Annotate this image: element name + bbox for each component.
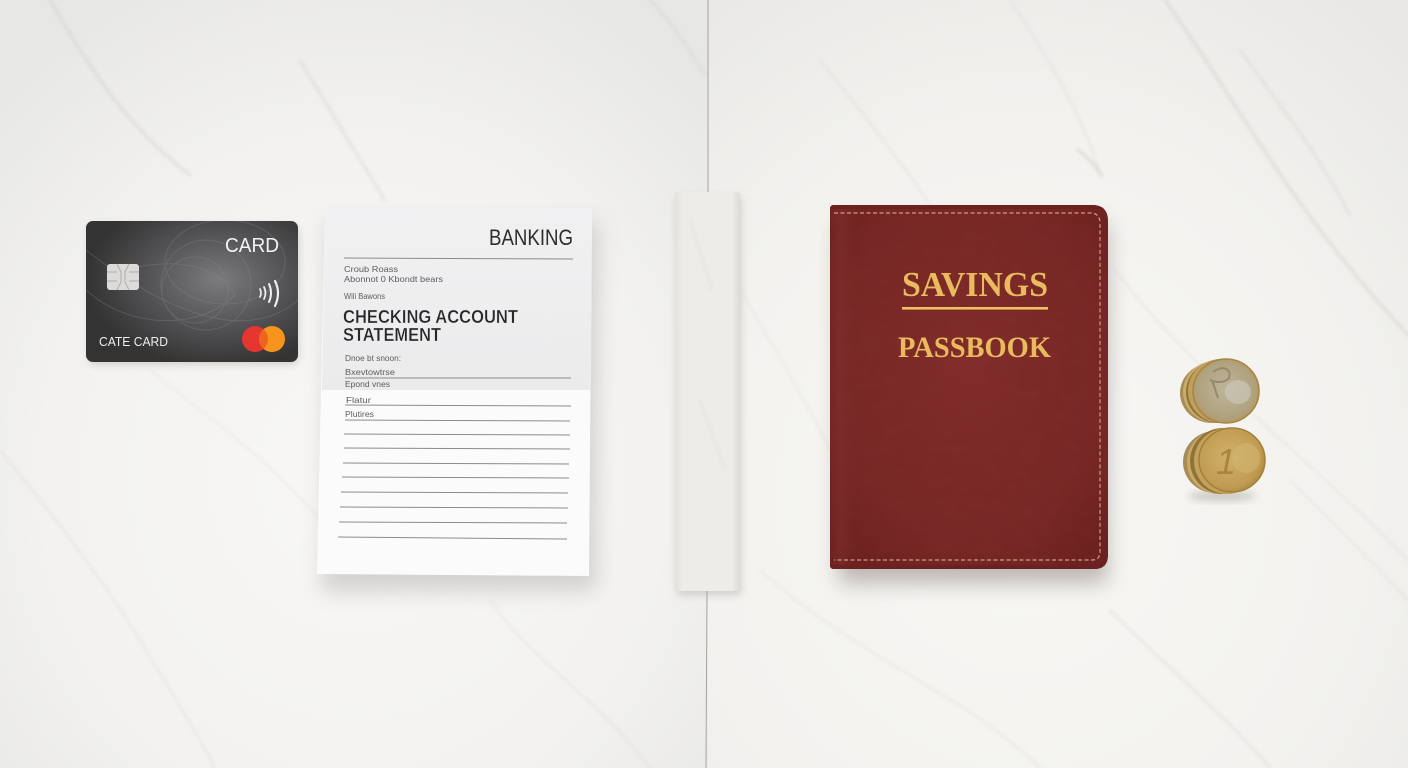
passbook stitching: [834, 213, 1100, 560]
savings passbook: [830, 205, 1108, 584]
coin stacks: [1180, 359, 1265, 501]
upper coin stack: [1180, 359, 1259, 423]
card swirl pattern: [86, 220, 298, 330]
contactless icon: [260, 281, 278, 306]
statement rows text: Plutires: [345, 409, 374, 419]
account details text: Croub Roass: [344, 264, 398, 274]
account details text: [344, 264, 443, 301]
coin numeral: 1: [1216, 441, 1236, 482]
statement heading: STATEMENT: [343, 325, 441, 345]
statement heading: CHECKING ACCOUNT: [343, 307, 518, 327]
cardholder name: CATE CARD: [99, 334, 168, 349]
statement rows text: Flatur: [346, 395, 371, 405]
passbook title: PASSBOOK: [898, 331, 1052, 364]
card title: CARD: [225, 235, 279, 257]
card chip: [107, 264, 139, 290]
credit card: [86, 220, 299, 365]
marble slab seam: [706, 0, 708, 768]
passbook title: [898, 265, 1052, 364]
account details text: Wili Bawons: [344, 291, 385, 301]
checking account statement: [317, 208, 598, 592]
lower coin stack: [1183, 428, 1265, 494]
statement rows text: Bxevtowtrse: [345, 367, 395, 377]
statement upper fold: [322, 208, 592, 390]
mastercard logo: [242, 326, 285, 352]
account details text: Abonnot 0 Kbondt bears: [344, 274, 443, 284]
statement heading: [343, 307, 518, 345]
statement rows text: [345, 353, 401, 419]
bank name: BANKING: [489, 225, 573, 250]
marble divider bar: [675, 192, 741, 595]
statement rows text: Dnoe bt snoon:: [345, 353, 401, 363]
statement rules: [338, 258, 573, 539]
statement rows text: Epond vnes: [345, 379, 390, 389]
passbook title: SAVINGS: [902, 265, 1048, 304]
